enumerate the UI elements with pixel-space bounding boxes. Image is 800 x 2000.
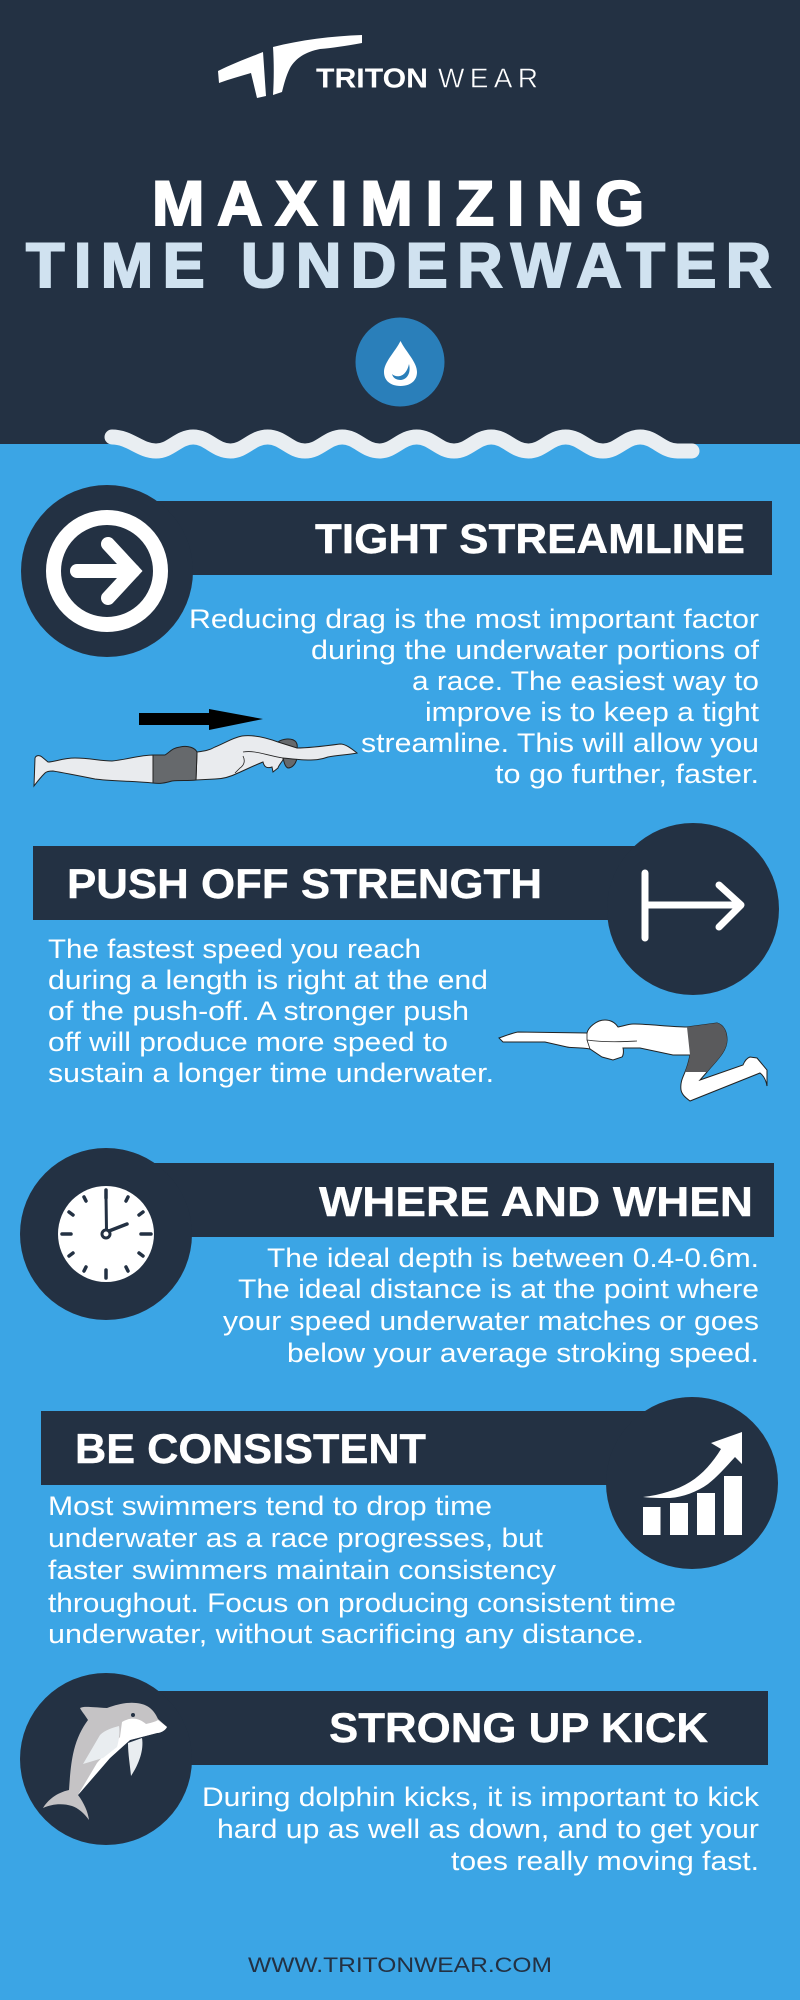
illustration: swimmer in streamline xyxy=(34,736,357,786)
panel: be consistent xyxy=(41,1397,778,1649)
text block: where and when xyxy=(223,1243,759,1368)
panel: where and when xyxy=(20,1148,774,1368)
arrow: direction of travel xyxy=(139,709,263,730)
heading bar: strong up kick xyxy=(106,1691,768,1765)
heading bar: tight streamline xyxy=(107,501,772,575)
text block: tight streamline: during the underwater portions of xyxy=(311,635,760,665)
footer: website: WWW.TRITONWEAR.COM xyxy=(248,1954,552,1977)
heading bar: where and when xyxy=(106,1163,774,1237)
text block: be consistent: throughout. Focus on producing consistent time xyxy=(48,1588,676,1618)
panel: tight streamline xyxy=(21,485,772,789)
text block: where and when: below your average stroking speed. xyxy=(287,1338,759,1368)
heading bar: where and when: WHERE AND WHEN xyxy=(319,1178,753,1225)
heading bar: be consistent xyxy=(41,1411,692,1485)
text block: push off strength xyxy=(48,934,494,1088)
heading bar: strong up kick: STRONG UP KICK xyxy=(329,1704,708,1751)
title: MAXIMIZING xyxy=(152,169,657,239)
panel: strong up kick xyxy=(20,1673,768,1876)
text block: tight streamline: a race. The easiest way to xyxy=(412,666,759,696)
text block: push off strength: off will produce more speed to xyxy=(48,1027,448,1057)
text block: be consistent xyxy=(48,1491,676,1649)
text block: where and when: your speed underwater matches or goes xyxy=(223,1306,759,1336)
heading bar: be consistent: BE CONSISTENT xyxy=(75,1425,426,1472)
heading bar: push off strength xyxy=(33,846,693,920)
text block: be consistent: underwater as a race progresses, but xyxy=(48,1523,544,1553)
text block: be consistent: Most swimmers tend to drop time xyxy=(48,1491,492,1521)
icon: rising bar chart xyxy=(606,1397,778,1569)
text block: be consistent: underwater, without sacrificing any distance. xyxy=(48,1619,644,1649)
icon: water drop xyxy=(356,318,444,406)
text block: tight streamline: improve is to keep a tight xyxy=(425,697,760,727)
icon: arrow in circle xyxy=(21,485,193,657)
text block: tight streamline: streamline. This will allow you xyxy=(361,728,759,758)
logo: Triton Wear xyxy=(218,35,538,98)
icon: dolphin xyxy=(20,1673,192,1845)
logo: Triton Wear: WEAR xyxy=(438,62,538,94)
text block: be consistent: faster swimmers maintain consistency xyxy=(48,1555,557,1585)
header panel xyxy=(0,0,800,444)
heading bar: push off strength: PUSH OFF STRENGTH xyxy=(67,860,542,907)
wave xyxy=(112,437,692,451)
text block: tight streamline xyxy=(189,604,760,789)
heading bar: tight streamline: TIGHT STREAMLINE xyxy=(315,515,745,562)
text block: push off strength: during a length is right at the end xyxy=(48,965,488,995)
text block: strong up kick: During dolphin kicks, it is important to kick xyxy=(202,1782,760,1812)
text block: push off strength: of the push-off. A stronger push xyxy=(48,996,469,1026)
illustration: swimmer pushing off xyxy=(499,1020,767,1101)
icon: push-off arrow xyxy=(607,823,779,995)
text block: where and when: The ideal depth is between 0.4-0.6m. xyxy=(267,1243,759,1273)
text block: push off strength: The fastest speed you reach xyxy=(48,934,421,964)
text block: tight streamline: to go further, faster. xyxy=(495,759,759,789)
icon: clock xyxy=(20,1148,192,1320)
logo: Triton Wear: TRITON xyxy=(316,62,428,94)
title: TIME UNDERWATER xyxy=(26,231,781,301)
text block: tight streamline: Reducing drag is the most important factor xyxy=(189,604,759,634)
panel: push off strength xyxy=(33,823,779,1101)
text block: push off strength: sustain a longer time underwater. xyxy=(48,1058,494,1088)
text block: strong up kick: toes really moving fast. xyxy=(451,1846,759,1876)
title xyxy=(26,169,781,301)
text block: strong up kick: hard up as well as down, and to get your xyxy=(217,1814,759,1844)
text block: strong up kick xyxy=(202,1782,760,1876)
text block: where and when: The ideal distance is at the point where xyxy=(238,1274,759,1304)
